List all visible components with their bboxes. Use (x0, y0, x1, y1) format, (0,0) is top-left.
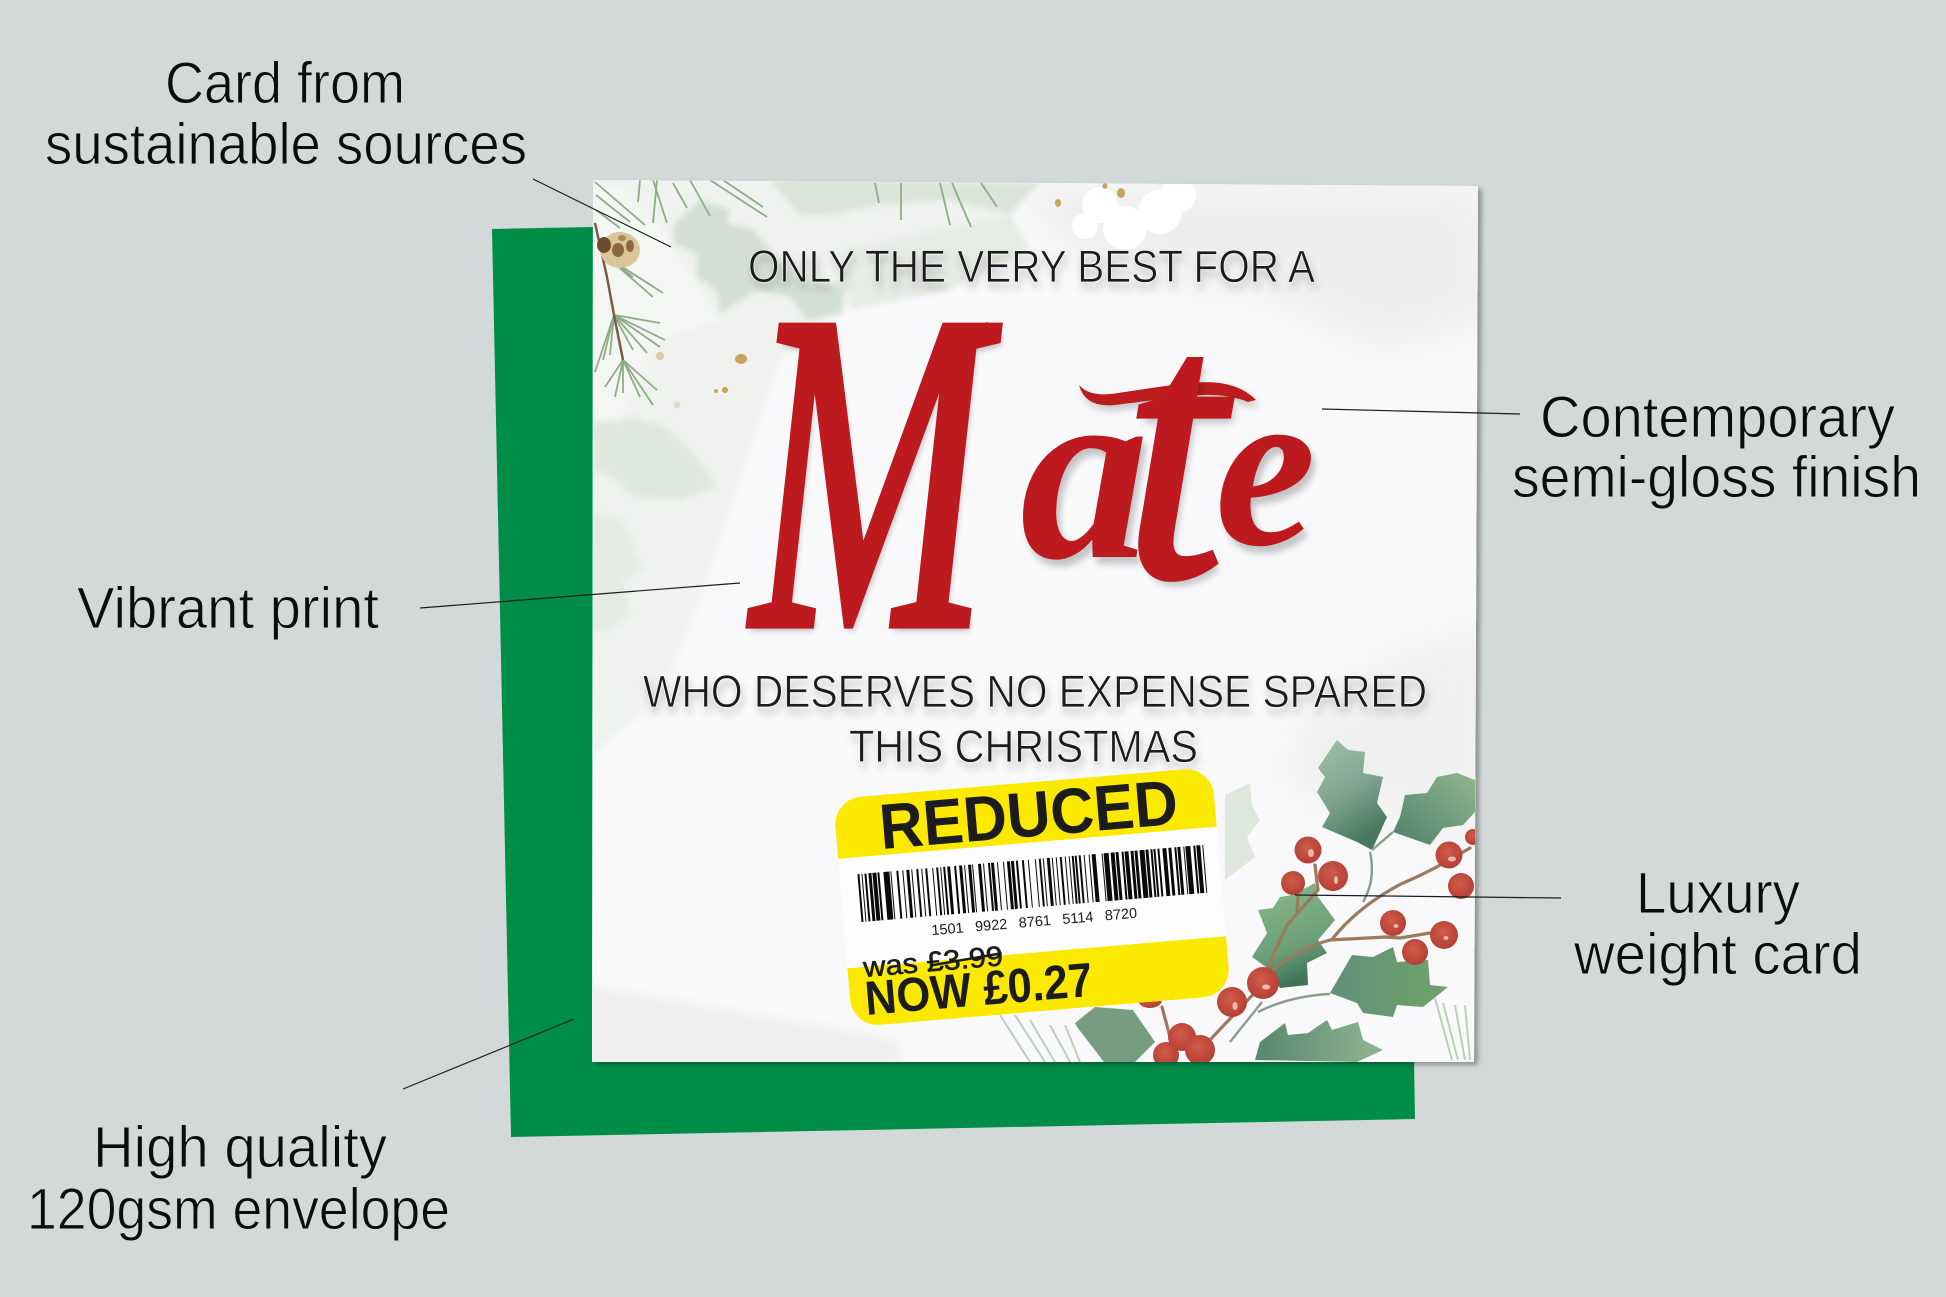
leader line: sustainable sources (533, 179, 671, 247)
leader line: envelope (403, 1019, 574, 1089)
label: vibrant print: Vibrant print (77, 576, 379, 641)
was price: was £3.99 (861, 940, 1004, 983)
leader line: vibrant print (420, 583, 740, 608)
label: contemporary semi-gloss finish: Contemporary (1540, 385, 1895, 450)
sticker top band (833, 767, 1217, 859)
script word: Mate: a (1020, 327, 1149, 613)
pale pine needles (1000, 998, 1470, 1062)
label: luxury weight card: weight card (1573, 922, 1862, 987)
holly berries (1138, 829, 1481, 1068)
label: card from sustainable sources: sustainable sources (45, 112, 527, 177)
label: luxury weight card (1573, 861, 1862, 987)
reduced text: REDUCED (877, 766, 1181, 863)
sticker base (1138, 1000, 1162, 1003)
pine branch (595, 223, 623, 360)
greeting card (585, 170, 1490, 1070)
label: high quality envelope (27, 1115, 450, 1242)
white blossoms (1072, 177, 1196, 250)
label: card from sustainable sources: Card from (165, 51, 405, 116)
pale holly leaf behind label (1225, 783, 1260, 880)
label: high quality envelope: 120gsm envelope (27, 1177, 450, 1242)
barcode digits: 1501 9922 8761 5114 8720 (931, 906, 1138, 939)
holly branches (1162, 832, 1470, 1042)
flourish on script word (1079, 382, 1256, 405)
pine cone (597, 232, 640, 268)
barcode (859, 869, 1206, 898)
heading: who deserves: WHO DESERVES NO EXPENSE SPARED (643, 666, 1427, 717)
card base (592, 180, 1478, 1062)
holly leaves (1075, 740, 1475, 1062)
strike through (932, 953, 1002, 965)
leader line: luxury weight card (1295, 895, 1561, 898)
script word: Mate: t (1124, 235, 1224, 658)
heading: only the very best: ONLY THE VERY BEST FOR A (748, 241, 1315, 292)
gold specks (656, 183, 1125, 408)
envelope (492, 227, 1415, 1137)
leader line: semi-gloss finish (1322, 409, 1520, 414)
pine needles top-left (595, 180, 997, 405)
script word: Mate: M (752, 221, 987, 723)
label: card from sustainable sources (45, 51, 527, 177)
berry highlights (1232, 849, 1456, 1010)
label: high quality envelope: High quality (93, 1115, 387, 1180)
heading: this christmas: THIS CHRISTMAS (849, 721, 1198, 772)
label: luxury weight card: Luxury (1636, 861, 1800, 926)
pale green washes (593, 180, 1040, 630)
label: contemporary semi-gloss finish: semi-gloss finish (1512, 445, 1921, 510)
reduced price sticker (833, 763, 1231, 1027)
label: contemporary semi-gloss finish (1512, 385, 1921, 510)
script word: Mate: e (1215, 338, 1316, 595)
now price: NOW £0.27 (863, 954, 1094, 1026)
sticker bottom band (847, 936, 1231, 1027)
watercolor background (585, 170, 1490, 1070)
